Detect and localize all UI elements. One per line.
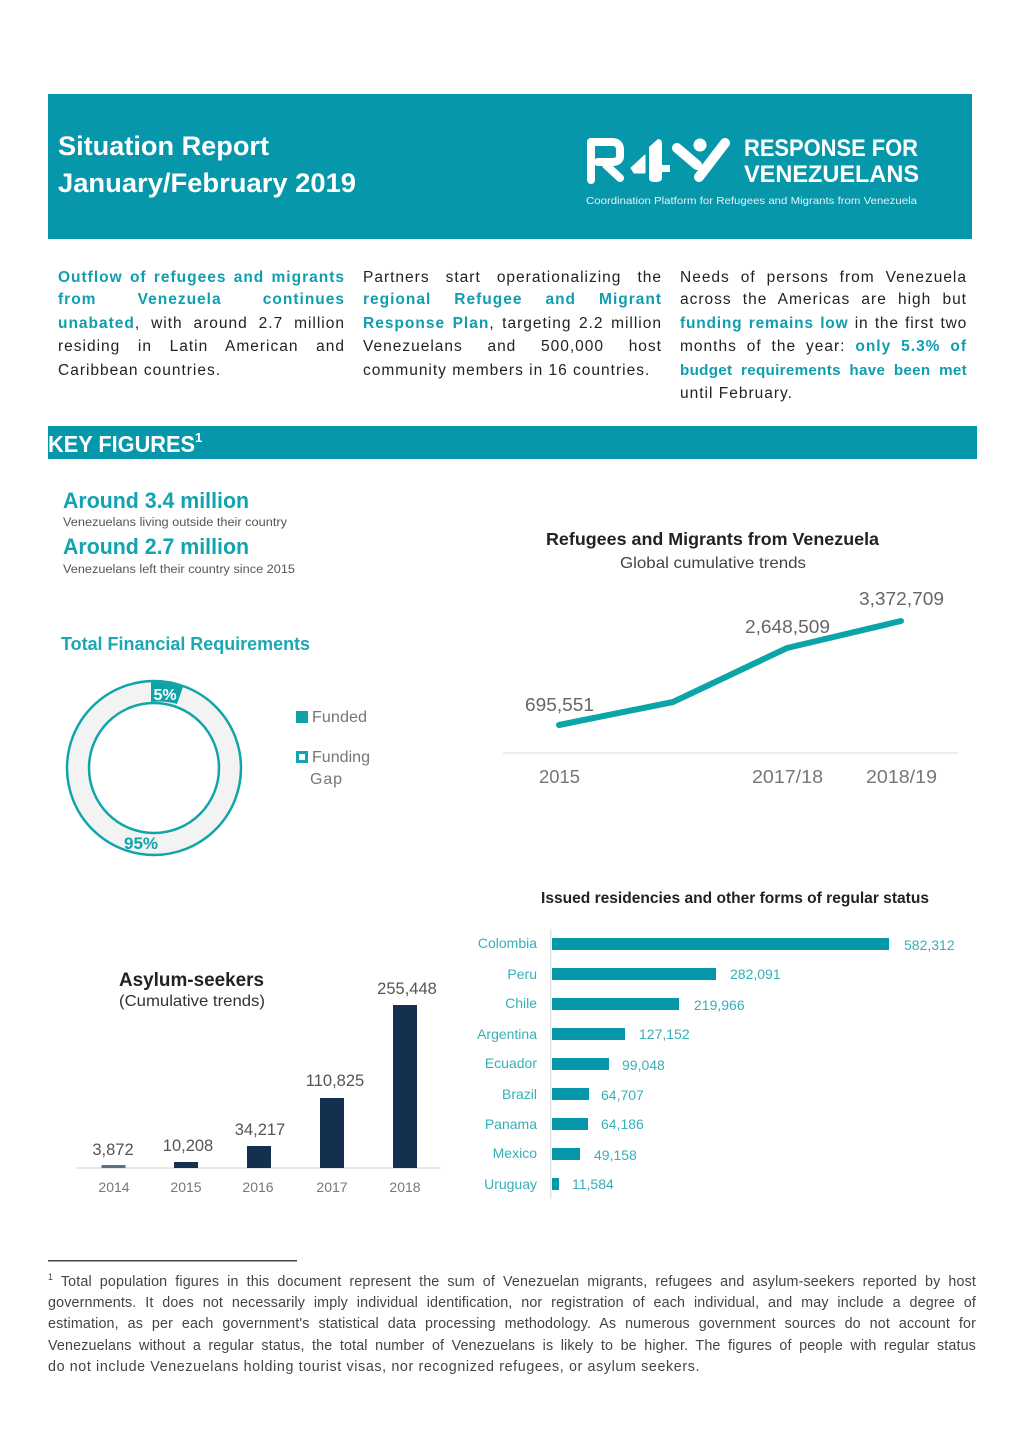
footnote: governments. It does not necessarily imply individual identification, nor registration of each individual, and may include a degree of [48,1295,976,1311]
line chart title: Refugees and Migrants from Venezuela [546,529,879,549]
bar chart: issued residencies: 49,158 [594,1147,637,1163]
line chart title [546,529,879,572]
bar chart: issued residencies: 582,312 [904,937,955,953]
line chart: refugees and migrants: 695,551 [525,695,594,715]
line chart: refugees and migrants: 2017/18 [752,767,823,787]
bar chart: issued residencies: Chile [505,995,537,1011]
key figure: 2.7 million: Venezuelans left their country since 2015 [63,564,295,576]
footnote: Venezuelans without a regular status, the total number of Venezuelans is likely to be higher. The figures of people with regular status [48,1338,976,1354]
key figures heading bar [48,426,977,459]
report title: Situation Report [58,131,269,161]
donut legend [296,709,370,788]
key figure: 3.4 million: Venezuelans living outside their country [63,517,287,529]
bar chart: asylum-seekers: 2014 [98,1179,130,1195]
residencies chart title: Issued residencies and other forms of regular status [541,890,929,907]
bar chart: issued residencies: 282,091 [730,966,781,982]
key figure: 2.7 million [63,534,295,576]
donut chart [67,681,241,855]
bar chart: issued residencies: Ecuador [485,1055,537,1071]
intro column 2: regional Refugee and Migrant [363,291,662,308]
footnote: 1 Total population figures in this document represent the sum of Venezuelan migrants, refugees and asylum-seekers reported by host [48,1272,976,1290]
donut legend: Funded [312,709,367,726]
intro column 1: unabated, with around 2.7 million [58,315,345,332]
intro column 2 [363,269,662,379]
line chart: refugees and migrants: 3,372,709 [859,589,944,609]
bar chart: issued residencies: 64,707 [601,1087,644,1103]
bar chart: issued residencies: 127,152 [639,1026,690,1042]
bar chart: asylum-seekers: 2018 [389,1179,421,1195]
line chart: refugees and migrants [503,529,958,787]
bar chart: asylum-seekers: 2017 [316,1179,348,1195]
bar chart: asylum-seekers: 34,217 [235,1121,285,1139]
key figures heading bar: KEY FIGURES [48,431,195,457]
bar chart: asylum-seekers: 110,825 [306,1072,364,1090]
intro column 2: Partners start operationalizing the [363,269,662,286]
line chart: refugees and migrants: 2018/19 [866,767,937,787]
asylum chart title [119,970,265,1010]
intro column 3: Needs of persons from Venezuela [680,269,967,286]
intro column 3: funding remains low in the first two [680,315,967,332]
footnote: do not include Venezuelans holding tourist visas, nor recognized refugees, or asylum seekers. [48,1359,700,1375]
intro column 1: Outflow of refugees and migrants [58,269,345,286]
intro column 3: until February. [680,385,793,402]
bar chart: issued residencies: 64,186 [601,1116,644,1132]
bar chart: asylum-seekers: 2015 [170,1179,202,1195]
intro column 2: Venezuelans and 500,000 host [363,338,662,355]
intro column 2: Response Plan, targeting 2.2 million [363,315,662,332]
line chart: refugees and migrants: 2015 [539,767,580,787]
bar chart: issued residencies: Brazil [502,1086,537,1102]
intro column 3: budget requirements have been met [680,362,967,379]
R4V logo [586,135,919,207]
line chart: refugees and migrants: 2,648,509 [745,617,830,637]
key figure: 3.4 million [63,488,287,529]
bar chart: issued residencies: Uruguay [484,1176,537,1192]
bar chart: issued residencies: 11,584 [572,1176,614,1192]
heading: total financial requirements: Total Financial Requirements [61,634,310,654]
footnote [48,1272,976,1375]
bar chart: issued residencies: 219,966 [694,997,745,1013]
key figure: 3.4 million: Around 3.4 million [63,488,249,513]
intro column 1 [58,269,345,379]
bar chart: issued residencies [477,890,955,1199]
intro column 3: months of the year: only 5.3% of [680,338,967,355]
footnote rule [48,1260,297,1262]
donut legend: Funding [312,749,370,766]
bar chart: asylum-seekers: 10,208 [163,1137,213,1155]
report title [58,131,356,198]
bar chart: asylum-seekers: 255,448 [377,980,437,998]
report title: January/February 2019 [58,168,356,198]
donut chart: 5% [153,687,177,704]
R4V logo: RESPONSE FOR [744,135,918,162]
intro column 3: across the Americas are high but [680,291,967,308]
line chart title: Global cumulative trends [620,555,806,572]
bar chart: issued residencies: Mexico [493,1145,537,1161]
bar chart: issued residencies: 99,048 [622,1057,665,1073]
intro column 1: from Venezuela continues [58,291,345,308]
bar chart: asylum-seekers: 2016 [242,1179,274,1195]
bar chart: issued residencies: Argentina [477,1026,537,1042]
donut legend: Gap [310,771,342,788]
bar chart: asylum-seekers: 3,872 [92,1141,134,1159]
key figures heading bar: 1 [195,430,202,445]
bar chart: issued residencies: Colombia [478,935,537,951]
intro column 3 [680,269,967,402]
intro column 2: community members in 16 countries. [363,362,650,379]
key figure: 2.7 million: Around 2.7 million [63,534,249,559]
intro column 1: residing in Latin American and [58,338,345,355]
bar chart: issued residencies: Panama [485,1116,537,1132]
footnote: estimation, as per each government's statistical data processing methodology. As numerous government sources do not account for [48,1316,976,1332]
asylum chart title: (Cumulative trends) [119,993,265,1010]
R4V logo: VENEZUELANS [744,161,919,188]
header banner [48,94,972,239]
donut chart: 95% [124,834,158,853]
bar chart: asylum-seekers [76,970,441,1195]
intro column 1: Caribbean countries. [58,362,221,379]
bar chart: issued residencies: Peru [507,966,537,982]
asylum chart title: Asylum-seekers [119,970,264,991]
R4V logo: Coordination Platform for Refugees and Migrants from Venezuela [586,195,917,207]
